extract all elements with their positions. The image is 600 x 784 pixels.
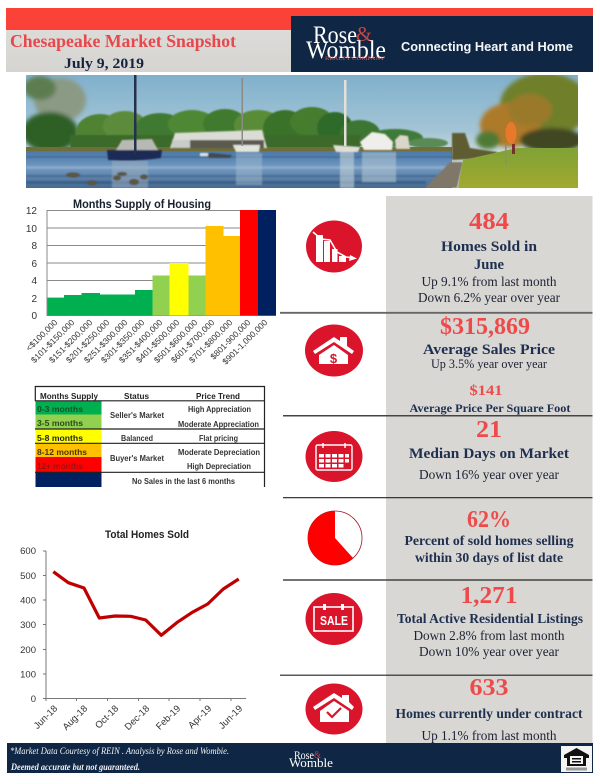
bar chart: months supply of housing: 4 bbox=[31, 276, 37, 287]
bar chart: months supply of housing: 12 bbox=[26, 206, 37, 217]
legend table: Months Supply bbox=[40, 391, 98, 401]
grey stats column bbox=[386, 196, 592, 744]
footer bar bbox=[7, 743, 593, 773]
footer logo: Rose bbox=[294, 748, 314, 762]
stat: median days on market: Median Days on Market bbox=[409, 446, 569, 462]
stat: homes sold: Up 9.1% from last month bbox=[422, 275, 556, 290]
icon: equal housing bbox=[561, 746, 592, 772]
legend table: 0-3 months bbox=[37, 404, 83, 414]
logo: Rose and Womble: Rose bbox=[313, 22, 357, 49]
legend table: Buyer's Market bbox=[110, 454, 164, 463]
logo: Rose and Womble bbox=[306, 22, 386, 64]
icon: falling bar chart bbox=[306, 220, 362, 272]
stat: under contract bbox=[396, 675, 583, 744]
legend table: No Sales in the last 6 months bbox=[132, 477, 236, 486]
stat: under contract: Homes currently under contract bbox=[396, 707, 583, 722]
stat: average sales price: Average Price Per Square Foot bbox=[410, 401, 570, 415]
stat: percent sold within 30 days: Percent of sold homes selling bbox=[404, 534, 574, 549]
bar chart: months supply of housing: $301-$350,000 bbox=[99, 317, 147, 365]
bar chart: months supply of housing bbox=[24, 197, 276, 367]
stat: homes sold: June bbox=[474, 257, 504, 273]
line chart: total homes sold: 300 bbox=[20, 620, 36, 631]
legend table: High Depreciation bbox=[187, 462, 251, 471]
legend table: Balanced bbox=[121, 434, 153, 443]
legend table: 12+ months bbox=[37, 461, 83, 471]
footer logo bbox=[289, 748, 333, 770]
bar chart: months supply of housing: $901-1,000,000 bbox=[220, 317, 270, 367]
line chart: total homes sold: 500 bbox=[20, 571, 36, 582]
stat: average sales price: Average Sales Price bbox=[423, 342, 555, 358]
chart title: Months Supply of Housing bbox=[73, 197, 211, 211]
stat: average sales price: Up 3.5% year over year bbox=[431, 356, 548, 371]
bar chart: months supply of housing: $601-$700,000 bbox=[169, 317, 217, 365]
line chart: total homes sold: Jun-19 bbox=[217, 703, 245, 732]
bar chart: months supply of housing: $501-$600,000 bbox=[152, 317, 200, 365]
line chart: total homes sold bbox=[20, 529, 246, 733]
line chart: total homes sold: Feb-19 bbox=[154, 703, 183, 732]
line chart: total homes sold: 0 bbox=[31, 694, 36, 705]
icon: house with check mark bbox=[306, 684, 362, 734]
footer disclaimer: Deemed accurate but not guaranteed. bbox=[10, 763, 140, 773]
tagline: Connecting Heart and Home bbox=[401, 39, 573, 54]
bar chart: months supply of housing: 0 bbox=[31, 311, 37, 322]
icon: house with dollar sign: $ bbox=[330, 351, 338, 366]
icon: calendar bbox=[306, 431, 362, 482]
legend table: Status bbox=[124, 391, 149, 401]
stat: active listings: Down 2.8% from last month bbox=[414, 629, 564, 644]
stat: under contract: 633 bbox=[470, 675, 508, 701]
line chart: total homes sold: 100 bbox=[20, 670, 36, 680]
line chart title: Total Homes Sold bbox=[105, 529, 189, 541]
line chart: total homes sold: Oct-18 bbox=[93, 703, 121, 731]
bar chart: months supply of housing: 6 bbox=[31, 259, 37, 270]
stat: average sales price: $141 bbox=[470, 383, 502, 399]
legend table: High Appreciation bbox=[188, 405, 251, 414]
stat: median days on market: Down 16% year over year bbox=[419, 468, 559, 483]
legend table bbox=[35, 386, 265, 487]
bar chart: months supply of housing: $201-$250,000 bbox=[64, 317, 112, 365]
legend table: Flat pricing bbox=[199, 434, 238, 443]
line chart: total homes sold: Apr-19 bbox=[186, 703, 214, 731]
legend table: 3-5 months bbox=[37, 418, 83, 428]
stat: active listings: Total Active Residential Listings bbox=[397, 612, 584, 627]
stat: active listings: Down 10% year over year bbox=[419, 645, 559, 660]
bar chart: months supply of housing: $701-$800,000 bbox=[187, 317, 235, 365]
bar chart: months supply of housing: $401-$500,000 bbox=[134, 317, 182, 365]
stat: percent sold within 30 days: 62% bbox=[467, 507, 511, 533]
footer disclaimer: *Market Data Courtesy of REIN . Analysis by Rose and Wombie. bbox=[10, 746, 229, 757]
legend table: Moderate Depreciation bbox=[178, 448, 260, 457]
bar chart: months supply of housing: $801-900,000 bbox=[208, 317, 253, 362]
stat: active listings: 1,271 bbox=[460, 583, 518, 609]
title: Chesapeake Market Snapshot bbox=[10, 31, 236, 51]
stat: average sales price bbox=[410, 314, 570, 415]
bar chart: months supply of housing: 2 bbox=[31, 294, 37, 305]
bar chart: months supply of housing: $351-$400,000 bbox=[117, 317, 165, 365]
stat: average sales price: $315,869 bbox=[440, 314, 530, 340]
stat: median days on market: 21 bbox=[476, 417, 502, 443]
bar chart: months supply of housing: 10 bbox=[26, 224, 37, 235]
logo: Rose and Womble: REALTY COMPANY bbox=[325, 57, 386, 62]
stat: percent sold within 30 days bbox=[404, 507, 574, 566]
legend table: Price Trend bbox=[196, 391, 240, 401]
line chart: total homes sold: Jun-18 bbox=[32, 703, 60, 732]
stat: active listings bbox=[397, 583, 584, 660]
legend table: 8-12 months bbox=[37, 447, 87, 457]
stat: homes sold bbox=[418, 209, 560, 306]
footer disclaimer bbox=[10, 746, 229, 773]
line chart: total homes sold: 200 bbox=[20, 645, 36, 656]
footer logo: & bbox=[314, 750, 321, 761]
icon: house with dollar sign bbox=[305, 324, 363, 376]
bar chart: months supply of housing: 8 bbox=[31, 241, 37, 252]
stat: median days on market bbox=[409, 417, 569, 483]
legend table: Seller's Market bbox=[110, 411, 164, 420]
stat: under contract: Up 1.1% from last month bbox=[422, 729, 556, 744]
bar chart: months supply of housing: <$100,000 bbox=[24, 317, 60, 353]
icon: sale sign: SALE bbox=[320, 613, 348, 628]
logo: Rose and Womble: & bbox=[356, 22, 372, 46]
bar chart: months supply of housing: $151-$200,000 bbox=[47, 317, 95, 365]
icon: sale sign bbox=[306, 593, 362, 645]
header banner bbox=[6, 8, 593, 72]
line chart: total homes sold: Aug-18 bbox=[61, 703, 90, 733]
date: July 9, 2019 bbox=[64, 56, 144, 72]
legend table: 5-8 months bbox=[37, 433, 83, 443]
stat: percent sold within 30 days: within 30 days of list date bbox=[415, 551, 563, 566]
line chart: total homes sold: 400 bbox=[20, 596, 36, 606]
logo: Rose and Womble: Womble bbox=[306, 37, 386, 64]
photo: harbor with sailboats bbox=[22, 73, 590, 188]
line chart: total homes sold: 600 bbox=[20, 546, 36, 557]
stat: homes sold: 484 bbox=[469, 209, 509, 235]
stat: homes sold: Down 6.2% year over year bbox=[418, 291, 560, 306]
footer logo: Womble bbox=[289, 755, 333, 770]
stat: homes sold: Homes Sold in bbox=[441, 239, 538, 255]
legend table: Moderate Appreciation bbox=[178, 420, 259, 429]
icon: pie chart 62 percent bbox=[308, 511, 362, 565]
bar chart: months supply of housing: $101-$150,000 bbox=[29, 317, 77, 365]
line chart: total homes sold: Dec-18 bbox=[123, 703, 152, 733]
bar chart: months supply of housing: $251-$300,000 bbox=[82, 317, 130, 365]
